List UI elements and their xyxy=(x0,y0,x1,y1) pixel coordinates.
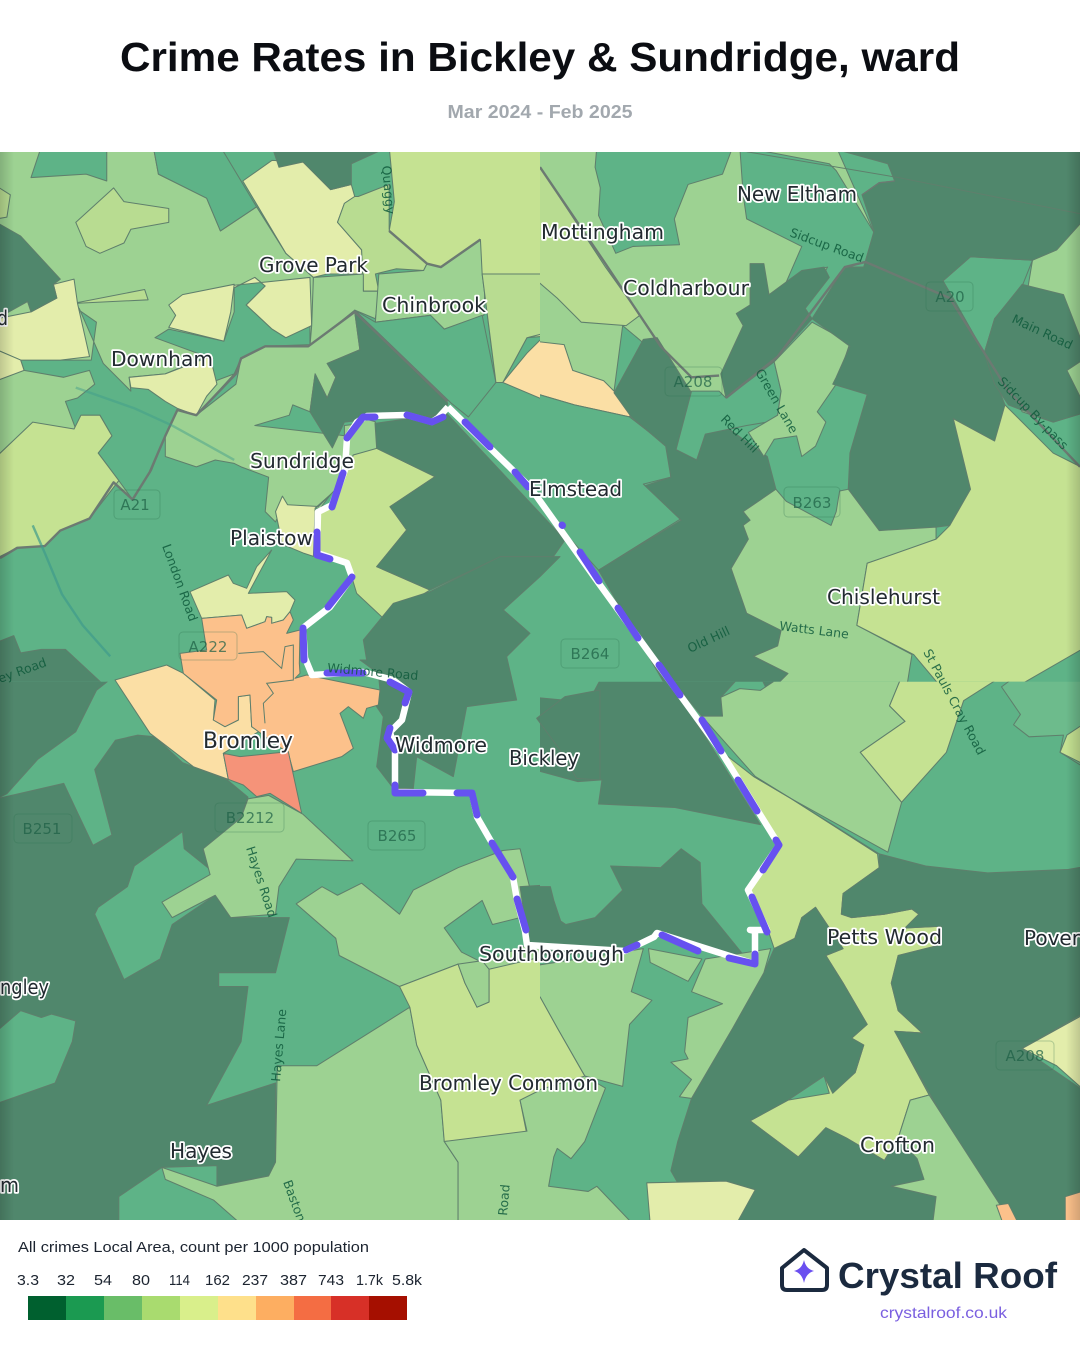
road name labels: Watts Lane xyxy=(779,618,850,642)
road number shields: A21 xyxy=(120,496,150,514)
road number shields: A208 xyxy=(1006,1047,1044,1065)
legend scale values: 5.8k xyxy=(392,1272,423,1289)
legend scale values: 114 xyxy=(169,1272,190,1289)
road name labels: London Road xyxy=(159,542,201,623)
road number shields xyxy=(14,282,1054,1070)
place name labels: Chinbrook xyxy=(382,293,486,317)
legend scale values: 387 xyxy=(280,1272,307,1289)
place name labels: Petts Wood xyxy=(827,925,942,949)
place name labels: Chislehurst xyxy=(827,585,940,609)
road name labels: Sidcup By-pass xyxy=(995,374,1072,452)
legend scale values: 743 xyxy=(318,1272,344,1289)
legend colour scale xyxy=(28,1296,407,1320)
road number shields: A222 xyxy=(189,638,227,656)
map quadrant: south-west areas xyxy=(0,677,548,1224)
place name labels: m xyxy=(0,1173,19,1197)
legend scale values: 237 xyxy=(242,1272,268,1289)
place name labels: Elmstead xyxy=(529,477,622,501)
road name labels: St Pauls Cray Road xyxy=(920,646,989,757)
map quadrant: south-east areas xyxy=(533,677,1080,1224)
map quadrant: north-west areas xyxy=(0,147,548,694)
legend scale values: 1.7k xyxy=(356,1272,383,1289)
place name labels: Southborough xyxy=(479,942,624,966)
map quadrant: north-east areas xyxy=(533,147,1080,698)
place name labels: Bickley xyxy=(509,746,579,770)
road name labels: Green Lane xyxy=(752,366,802,436)
place name labels: Crofton xyxy=(860,1133,935,1157)
road number shields: B251 xyxy=(23,820,61,838)
icon: house with star xyxy=(782,1250,827,1290)
road name labels: Red Hill xyxy=(718,412,762,456)
legend scale values: 32 xyxy=(57,1272,75,1289)
legend scale values: 54 xyxy=(94,1272,112,1289)
legend xyxy=(17,1239,423,1320)
road name labels: Baston xyxy=(280,1178,309,1224)
road number shields: B264 xyxy=(571,645,609,663)
place name labels: Pover xyxy=(1024,926,1080,950)
logo: Crystal Roof xyxy=(782,1250,1058,1322)
ward boundary: purple dashes xyxy=(303,415,779,964)
legend scale values xyxy=(17,1272,423,1289)
road name labels: Widmore Road xyxy=(327,660,419,683)
road name labels: Road xyxy=(495,1184,513,1216)
road name labels: Sidcup Road xyxy=(788,225,866,265)
place name labels: New Eltham xyxy=(737,182,857,206)
map area: Bromley town centre and central ward xyxy=(115,413,600,813)
place name labels: Plaistow xyxy=(230,526,313,550)
legend scale values: 80 xyxy=(132,1272,150,1289)
logo wordmark: Crystal Roof xyxy=(838,1255,1058,1296)
place name labels: Mottingham xyxy=(541,220,664,244)
logo url: crystalroof.co.uk xyxy=(880,1305,1008,1322)
place name labels xyxy=(0,182,1080,1197)
place name labels: Bromley xyxy=(203,729,293,754)
place name labels: Bromley Common xyxy=(419,1071,598,1095)
choropleth map panel xyxy=(0,147,1080,1224)
road name labels: Old Hill xyxy=(685,623,732,656)
road name labels: Hayes Road xyxy=(243,844,280,919)
road name labels xyxy=(0,165,1075,1224)
place name labels: Hayes xyxy=(170,1139,232,1163)
road number shields: A20 xyxy=(935,288,965,306)
ward boundary: white base line xyxy=(303,407,779,964)
road number shields: B265 xyxy=(378,827,416,845)
road name labels: Hayes Lane xyxy=(268,1008,289,1082)
legend scale values: 162 xyxy=(205,1272,230,1289)
legend title: All crimes Local Area, count per 1000 population xyxy=(18,1239,369,1256)
legend scale values: 3.3 xyxy=(17,1272,39,1289)
place name labels: Widmore xyxy=(395,733,487,757)
place name labels: ngley xyxy=(0,975,49,999)
place name labels: Downham xyxy=(111,347,213,371)
road number shields: B263 xyxy=(793,494,831,512)
road name labels: Main Road xyxy=(1010,311,1075,352)
subtitle: date range: Mar 2024 - Feb 2025 xyxy=(448,102,632,122)
road number shields: A208 xyxy=(674,373,712,391)
road number shields: B2212 xyxy=(226,809,274,827)
road name labels: Quaggy xyxy=(379,165,398,215)
place name labels: Sundridge xyxy=(250,449,354,473)
place name labels: Grove Park xyxy=(259,253,368,277)
place name labels: Coldharbour xyxy=(623,276,750,300)
title: Crime Rates in Bickley & Sundridge, ward xyxy=(120,34,960,80)
